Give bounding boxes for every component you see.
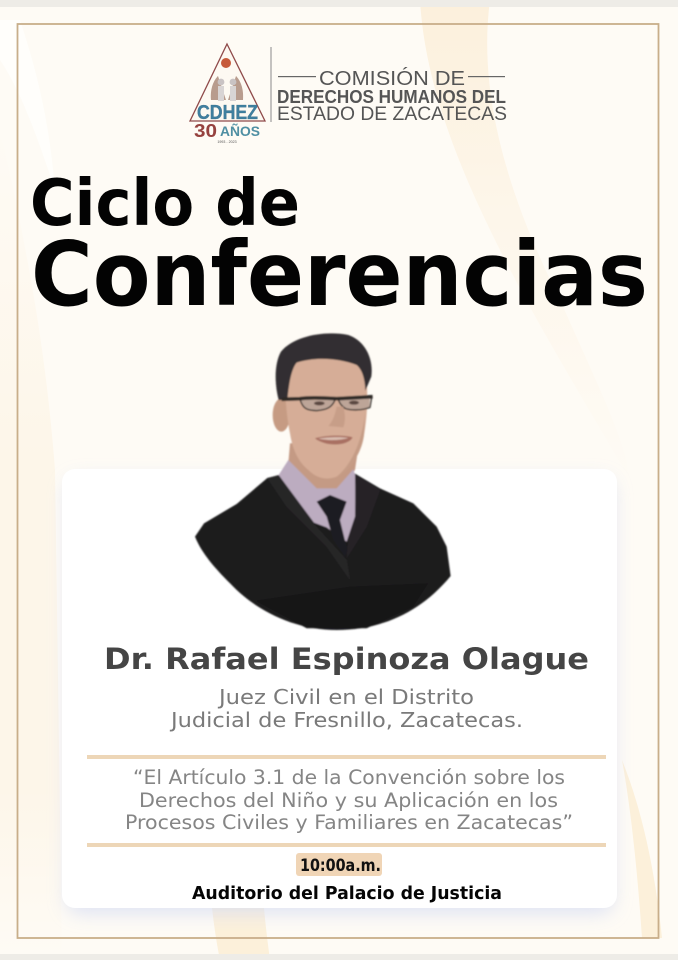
organization name: ESTADO DE ZACATECAS: [277, 103, 507, 125]
right cheek shade: [337, 410, 365, 477]
lapels: [267, 475, 350, 580]
eyeglass lenses: [301, 398, 370, 411]
conference title: “El Artículo 3.1 de la Convención sobre los: [133, 766, 565, 789]
anniversary label: [194, 121, 260, 144]
necktie: [317, 495, 347, 557]
eyes: [314, 401, 325, 405]
bottom rule: [87, 843, 606, 847]
triangle: [190, 44, 265, 121]
emblem wordmark: CDHEZ: [197, 102, 258, 124]
logo divider: [270, 47, 272, 122]
organization name: DERECHOS HUMANOS DEL: [277, 87, 506, 107]
neck: [288, 437, 360, 497]
anniversary label: AÑOS: [220, 122, 260, 139]
speaker role: Judicial de Fresnillo, Zacatecas.: [169, 708, 523, 732]
speaker name: Dr. Rafael Espinoza Olague: [104, 642, 589, 676]
nose shade: [328, 407, 345, 427]
speaker role: Juez Civil en el Distrito: [217, 685, 474, 709]
robe hem shade: [255, 583, 428, 628]
eyeglass frames: [282, 397, 373, 411]
organization name: [277, 67, 507, 125]
panel: speaker card: [62, 469, 617, 908]
time chip: 10:00a.m.: [300, 856, 381, 875]
shirt collar: [279, 460, 356, 542]
ear: [273, 398, 290, 432]
anniversary label: 30: [194, 121, 217, 141]
venue: Auditorio del Palacio de Justicia: [192, 884, 502, 904]
logo: CDHEZ triangle emblem: [190, 44, 265, 144]
title: [30, 167, 648, 326]
title: Ciclo de: [30, 167, 300, 241]
speaker role: [169, 685, 523, 732]
speaker portrait: [195, 333, 451, 630]
emblem sun: [221, 58, 231, 68]
conference title: [125, 766, 573, 834]
robe: [195, 473, 451, 630]
panel shadow: [66, 478, 614, 914]
emblem figures: [211, 76, 243, 101]
organization name: COMISIÓN DE: [319, 67, 465, 90]
hair: [276, 333, 372, 400]
conference title: Derechos del Niño y su Aplicación en los: [139, 789, 558, 812]
top rule: [87, 755, 606, 759]
face: [285, 355, 367, 479]
title: Conferencias: [31, 222, 648, 326]
mouth: [315, 436, 353, 444]
anniversary label: 1993 - 2023: [217, 140, 237, 144]
conference title: Procesos Civiles y Familiares en Zacatecas”: [125, 811, 573, 834]
